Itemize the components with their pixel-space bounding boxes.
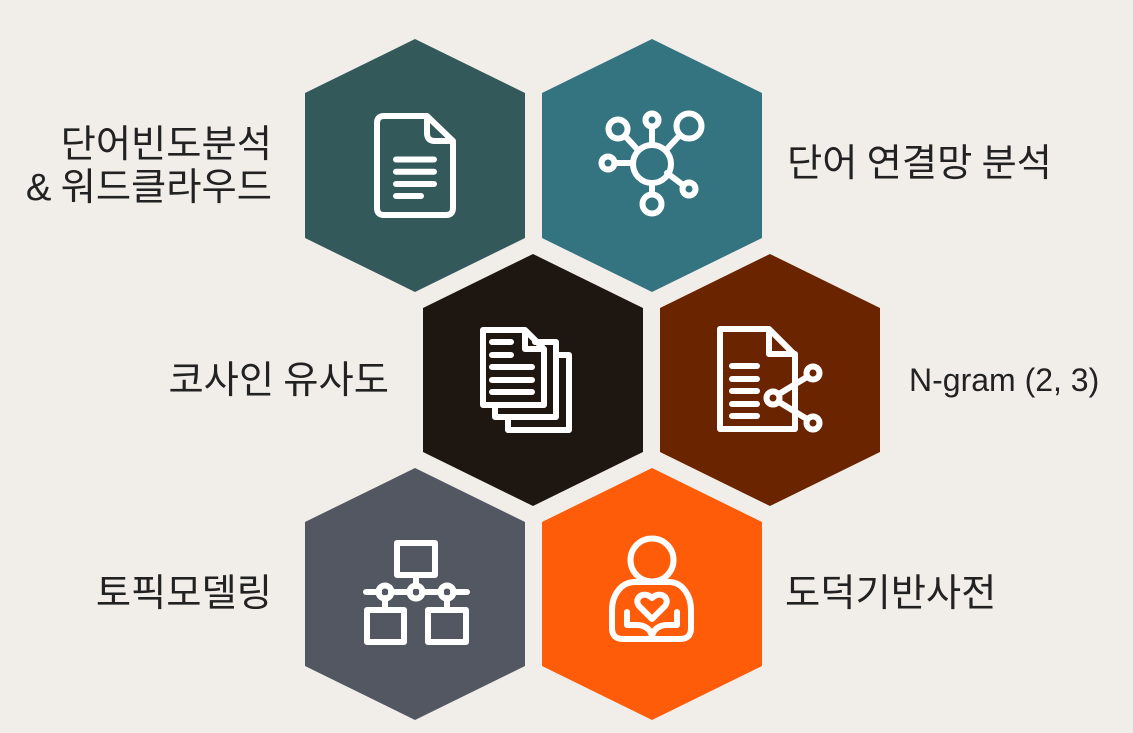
hexagon: word network [542, 39, 762, 292]
label: word network analysis: 단어 연결망 분석 [787, 142, 1052, 185]
label: topic modeling: 토픽모델링 [96, 572, 272, 615]
icon: document with branches [720, 329, 820, 430]
hexagon: word frequency [305, 39, 525, 292]
hexagon: moral foundations dictionary [542, 468, 762, 720]
label: word frequency and word cloud [26, 123, 272, 209]
label: word frequency and word cloud: & 워드클라우드 [26, 166, 272, 209]
icon: document [377, 116, 453, 215]
icon: stacked documents [483, 330, 569, 430]
icon: hierarchy [366, 543, 467, 642]
icon: network [602, 114, 702, 214]
hexagon: n-gram [660, 254, 880, 506]
hexagon: cosine similarity [423, 254, 643, 506]
label: n-gram: N-gram (2, 3) [909, 362, 1099, 398]
label: cosine similarity: 코사인 유사도 [168, 359, 389, 402]
hexagon: topic modeling [305, 468, 525, 720]
icon: person with heart [612, 538, 691, 639]
label: word frequency and word cloud: 단어빈도분석 [61, 123, 272, 166]
label: moral foundations dictionary: 도덕기반사전 [785, 572, 996, 615]
